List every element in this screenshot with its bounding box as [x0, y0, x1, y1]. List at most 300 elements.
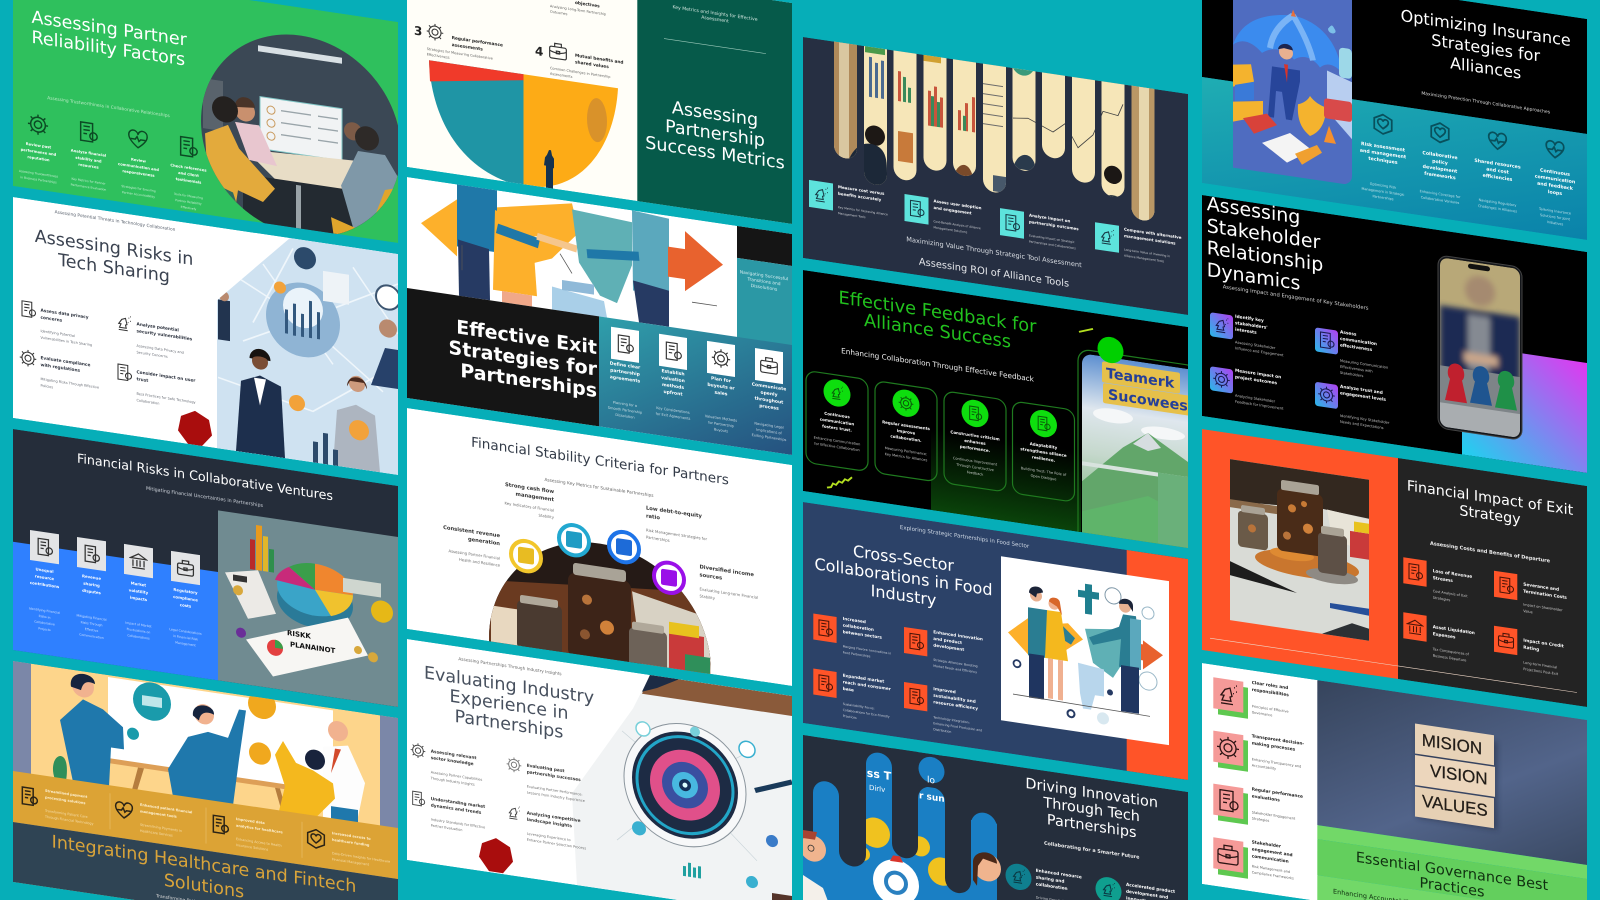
item: payment processing — [22, 785, 93, 826]
panel: Cross-Sector Collaborations in Food Industry — [803, 502, 1189, 780]
item: debt ratio: Risk Management Strategies for — [646, 527, 707, 541]
item: risk assessment: Optimizing Risk — [1370, 182, 1396, 190]
item: performance evaluations — [1213, 781, 1303, 833]
title: Stakeholder — [1207, 214, 1320, 254]
item: risk assessment: Partnerships — [1372, 194, 1394, 201]
item: past successes: partnership successes — [527, 769, 581, 783]
item: risk assessment: and management — [1360, 148, 1407, 161]
subtitle: Assessing Costs and Benefits of Departure — [1430, 541, 1551, 565]
item: transparent decisions — [1213, 728, 1304, 780]
item: analyze financial stability: Performance Evaluation — [71, 183, 106, 192]
title: Financial Stability Criteria for Partners — [471, 435, 729, 489]
item: expanded market — [813, 668, 892, 725]
card: continuous communication: fosters trust. — [822, 423, 852, 433]
item: performance evaluations: Stakeholder Engagement — [1252, 810, 1295, 821]
item: unequal contributions: Risks in — [39, 614, 50, 620]
item: increased collaboration: Increased — [843, 616, 866, 624]
phone photo: Teamerk — [1106, 366, 1175, 392]
item: unequal contributions: Projects — [38, 626, 51, 632]
item: liquidation expenses: Business Departure — [1433, 654, 1466, 663]
squiggle accents — [827, 290, 1093, 527]
item: resource sharing: Enhanced resource — [1036, 869, 1082, 881]
item: review communication: communication and — [118, 162, 159, 172]
item: partnership outcomes — [1000, 208, 1079, 251]
panel: Assessing Partner Reliability Factors — [13, 0, 403, 258]
title: Assessing — [672, 98, 758, 131]
item: clear agreements: Smooth Partnership — [608, 406, 643, 415]
item: performance evaluations: evaluations — [1252, 793, 1280, 804]
item: collaborative policy: Collaborative Ventures — [1421, 195, 1459, 205]
item 4: mutual benefits — [536, 42, 624, 78]
item: market volatility — [124, 544, 153, 641]
item: market volatility: Market — [131, 580, 146, 588]
subtitle: Assessing Impact and Engagement of Key Stakeholders — [1223, 284, 1369, 312]
item: performance evaluations: Regular performance — [1252, 787, 1303, 800]
card: constructive criticism: Feedback — [967, 470, 984, 477]
item: improved sustainability: sustainability and — [933, 693, 976, 704]
item 4: mutual benefits: Assessments — [550, 72, 573, 79]
item: trust levels: Identifying Key Stakeholder — [1340, 414, 1389, 425]
item: check references — [170, 135, 207, 213]
title: Financial Risks in Collaborative Ventures — [77, 452, 333, 504]
item: review past performance: Assessing Trustworthiness — [19, 169, 58, 179]
title: Strategies for — [1431, 31, 1540, 66]
item: shared resources: and cost — [1486, 166, 1510, 176]
item: revenue generation — [443, 525, 501, 568]
item: shared resources: Navigating Regulatory — [1479, 198, 1516, 208]
item: cost versus benefits: Management Tools — [838, 211, 866, 219]
card: constructive criticism: Continuous Improvement — [953, 456, 997, 467]
item: partnership outcomes: Evaluating Impact on Strategic — [1029, 233, 1074, 244]
title: Strategies for — [449, 336, 598, 381]
item: accelerated development — [1096, 875, 1175, 900]
item: stakeholder interests: Influence and Engagement — [1235, 346, 1284, 358]
title: Assessing — [1207, 192, 1300, 229]
item: resource sharing: collaboration — [1036, 881, 1068, 892]
item: unequal contributions: Unequal — [35, 566, 54, 574]
item: increased collaboration: Merging Flavors: Innovations in — [843, 644, 891, 656]
item: termination costs — [1494, 571, 1567, 620]
item: trust levels — [1315, 380, 1390, 431]
card: continuous communication: for Effective Collaboration — [814, 442, 860, 452]
divider — [1210, 638, 1577, 692]
item: communication effectiveness: Measuring Communication — [1340, 359, 1388, 370]
item: security vulnerabilities: security vulnerabilities — [136, 328, 193, 343]
item: security vulnerabilities: Analyze potential — [136, 322, 179, 334]
item: review communication: Review — [131, 157, 146, 164]
card: constructive criticism: enhances — [964, 438, 986, 446]
title: Effective Feedback for — [839, 287, 1036, 338]
item: clear agreements: agreements — [610, 374, 640, 385]
item: stakeholder interests: Identify key — [1235, 315, 1264, 324]
finger cut photo: r sun — [919, 791, 945, 805]
item: data privacy: Vulnerabilities in Tech Sharing — [41, 336, 92, 347]
title: Effective Exit — [456, 315, 597, 359]
item: user adoption — [904, 194, 982, 236]
item: cash flow — [505, 482, 555, 520]
item: performance evaluations: Strategies — [1252, 816, 1269, 823]
item: regulatory costs: costs — [180, 602, 192, 609]
title: Integrating Healthcare and Fintech — [52, 832, 356, 897]
item: diversified income: sources — [700, 572, 722, 582]
panel: Essential Governance Best Practices — [1202, 663, 1587, 900]
item: objectives: objectives — [575, 0, 600, 10]
item: review past performance: Review past — [26, 142, 51, 150]
item: analyze financial stability: Key Metrics for Partner — [71, 177, 106, 186]
item: valuation methods: Key Considerations — [656, 406, 690, 415]
item: increased collaboration — [813, 612, 891, 662]
item 3: performance assessments: assessments — [452, 42, 483, 53]
item: data analytics: analytics for healthcare — [236, 824, 283, 835]
item: patient financial tools: Streamlining Payments in — [140, 823, 182, 833]
item: review past performance: performance and — [21, 148, 57, 157]
item: termination costs: Impact on Shareholder — [1523, 603, 1562, 612]
item: regulatory costs: Legal Considerations — [169, 627, 202, 636]
item: alternatives: Compare with alternative — [1124, 227, 1181, 240]
item: communication loops: communication — [1535, 174, 1575, 186]
item: check references: and client — [178, 171, 199, 178]
item: data analytics: Enhancing Access to Health — [236, 837, 282, 848]
item: objectives: Outcomes — [550, 10, 568, 16]
item: valuation methods: methods — [662, 382, 684, 391]
item: data analytics: Improved data — [236, 817, 265, 825]
item: market dynamics: dynamics and trends — [431, 803, 482, 816]
item: enhanced innovation: Enhanced innovation — [933, 629, 983, 642]
item 4: mutual benefits: shared values — [575, 59, 609, 70]
item: project outcomes: project outcomes — [1235, 374, 1277, 386]
item: credit rating: Long-term Financial — [1523, 661, 1557, 670]
item: user trust: Collaboration — [136, 398, 159, 406]
half circle chart — [429, 60, 618, 198]
item: market dynamics — [413, 791, 485, 836]
item: transparent decisions: Transparent decision- — [1252, 734, 1304, 747]
card: constructive criticism: Constructive criticism — [950, 429, 1000, 442]
item: cost versus benefits — [809, 180, 888, 223]
item: payment processing: processing solutions — [45, 795, 85, 805]
item: clear roles: Principles of Effective — [1252, 704, 1289, 714]
card: adaptability — [1012, 401, 1074, 502]
item: enhanced innovation: Market Reach and Efficiency — [933, 664, 977, 674]
wooden blocks: VISION — [1430, 761, 1488, 789]
panel: Financial Risks in Collaborative Ventures — [13, 429, 398, 708]
circular jar photo — [487, 525, 712, 679]
item: revenue streams: Loss of Revenue — [1433, 569, 1472, 580]
title: Success Metrics — [645, 133, 785, 174]
item: alternatives: management solutions — [1124, 233, 1176, 246]
item: shared resources: Shared resources — [1474, 159, 1521, 171]
item: data analytics: Insurance Solutions — [236, 843, 268, 852]
item: patient financial tools: management tools — [140, 809, 177, 819]
item: revenue generation: Consistent revenue — [443, 525, 500, 539]
item: valuation methods: upfront — [663, 389, 683, 398]
card: constructive criticism — [944, 391, 1006, 492]
item: communicate: Communicate — [752, 383, 786, 393]
item: review communication — [118, 128, 159, 200]
item: check references: Tools for Measuring — [174, 192, 203, 200]
item: valuation methods — [656, 333, 691, 421]
item: review past performance — [19, 112, 58, 185]
item: cash flow: Key Indicators of Financial — [505, 500, 554, 513]
item: diversified income — [700, 564, 758, 607]
item: improved sustainability — [904, 682, 982, 739]
item: enhanced innovation: development — [933, 643, 964, 652]
item: revenue generation: Assessing Partner Financial — [448, 548, 500, 561]
title: Cross-Sector — [853, 541, 954, 575]
item: data privacy: Identifying Potential — [40, 329, 75, 338]
item: valuation methods: valuation — [661, 375, 685, 384]
item 3: performance assessments — [414, 24, 503, 60]
item: compliance: Mitigating Risks Through Effective — [40, 377, 99, 390]
item: competitive landscape: Analyzing competitive — [527, 811, 580, 824]
title: Partnerships — [460, 359, 597, 402]
item: payment processing: Transforming Patient Care — [45, 809, 87, 819]
item: buyouts: Valuation Methods — [705, 414, 737, 423]
item: accelerated development: Accelerated product — [1126, 883, 1175, 895]
item: market volatility: impacts — [130, 595, 148, 602]
item: cash flow: management — [516, 492, 554, 503]
item: stakeholder interests — [1210, 310, 1284, 358]
item: shared resources: Challenges in Alliances — [1478, 204, 1517, 214]
item: enhanced innovation — [904, 625, 983, 675]
title: Assessing ROI of Alliance Tools — [919, 257, 1069, 290]
title: Financial Impact of Exit — [1407, 478, 1573, 519]
item: valuation methods: for Exit Agreements — [656, 412, 691, 421]
red heptagon — [178, 408, 212, 447]
item: unequal contributions: Identifying Financial — [29, 606, 60, 615]
item: communication effectiveness: Effectiveness with — [1340, 365, 1373, 374]
item: credit rating: Impact on Credit — [1523, 639, 1564, 650]
item: trust levels: Needs and Expectations — [1340, 420, 1384, 430]
panel: Assessing ROI of Alliance Tools — [803, 17, 1188, 315]
item: communication effectiveness: Stakeholders — [1340, 371, 1363, 378]
subtitle: Mitigating Financial Uncertainties in Partnerships — [146, 486, 263, 509]
item: competitive landscape — [509, 805, 586, 851]
item: communicate: Exiting Partnerships — [752, 433, 787, 442]
card: regular assessments: collaboration. — [890, 433, 922, 443]
item: communicate: throughout — [755, 396, 784, 406]
item: increased collaboration: collaboration — [843, 622, 874, 632]
item: stakeholder interests: stakeholders' — [1235, 320, 1268, 331]
item: check references: Partner Reliability — [175, 198, 202, 206]
card: regular assessments: Measuring Performance: — [885, 446, 927, 456]
item: stakeholder engagement: Stakeholder — [1252, 840, 1281, 850]
finger cut photo: lo — [927, 775, 935, 787]
item: market dynamics: Understanding market — [431, 797, 485, 810]
item: compliance — [20, 350, 99, 389]
title: Partnerships — [1047, 812, 1136, 841]
title: Strategy — [1459, 503, 1521, 528]
panel: Effective Exit Strategies for Partnerships — [407, 177, 792, 455]
item: communicate: Navigating Legal — [754, 421, 784, 430]
item: buyouts: buyouts or — [707, 382, 735, 392]
panel: Assessing Partnership Success Metrics — [407, 0, 792, 224]
item: resource sharing: sharing and — [1036, 875, 1064, 885]
item: buyouts: sales — [715, 390, 728, 398]
item: valuation methods: Establish — [661, 369, 685, 378]
item: revenue generation: generation — [468, 537, 500, 547]
item: unequal contributions — [29, 530, 60, 634]
item 3: performance assessments: Strategies for Measuring Collaborative — [427, 47, 493, 61]
item: review communication: responsiveness — [122, 169, 155, 178]
item: diversified income: Evaluating Long-term Financial — [700, 586, 758, 600]
item: analyze financial stability: resources — [78, 163, 99, 170]
item: clear agreements — [608, 326, 643, 421]
target photo — [572, 663, 792, 900]
item: user adoption: and engagement — [934, 205, 972, 216]
item: termination costs: Severance and — [1523, 583, 1559, 593]
item: healthcare funding: Data-Driven Insights for Healthcare — [332, 851, 390, 864]
item: diversified income: Stability — [700, 593, 716, 601]
item: buyouts: for Partnership — [708, 421, 735, 428]
item: past successes: Evaluating Partner Performance: — [527, 785, 582, 797]
item: revenue disputes: Effective — [85, 627, 98, 633]
item: shared resources — [1474, 129, 1521, 214]
title: Evaluating Industry — [424, 663, 594, 708]
item: security vulnerabilities: Assessing Data Privacy and — [136, 344, 184, 355]
item: improved sustainability: Technology Integration: — [933, 715, 970, 725]
item: competitive landscape: Leveraging Experience to — [527, 832, 571, 842]
item: user adoption: Assess user adoption — [934, 198, 982, 210]
card: continuous communication: Continuous — [824, 411, 850, 419]
title: Tech Sharing — [57, 251, 170, 287]
item: clear agreements: partnership — [610, 367, 641, 378]
item: expanded market: reach and consumer — [843, 679, 892, 692]
wooden blocks: VALUES — [1422, 792, 1488, 820]
item: communication loops — [1535, 138, 1575, 228]
item: termination costs: Termination Costs — [1523, 589, 1567, 601]
item: clear roles: responsibilities — [1252, 687, 1289, 698]
card: regular assessments: Key Metrics for Alliances — [885, 452, 927, 462]
caption: Assessing Partnerships Through Industry Insights — [458, 656, 562, 676]
wooden blocks — [1415, 724, 1497, 830]
partnership illustration — [1001, 556, 1169, 745]
item: clear agreements: Dissolution — [615, 413, 635, 420]
item: shared resources: efficiencies — [1483, 173, 1513, 183]
item: past successes — [507, 756, 585, 803]
item: communication effectiveness: communication — [1340, 336, 1377, 347]
item: partnership outcomes: Analyze impact on — [1029, 212, 1070, 224]
item: regulatory costs: in Financial Risk — [173, 634, 198, 642]
panel: Effective Feedback for Alliance Success — [803, 270, 1198, 561]
item: sector knowledge: Assessing Partner Capabilities — [431, 770, 482, 782]
item: compliance: Policies — [41, 384, 53, 389]
item: past successes: Evaluating past — [527, 764, 564, 774]
item: liquidation expenses — [1403, 612, 1475, 664]
item: regulatory costs: compliance — [173, 594, 198, 603]
title: Reliability Factors — [31, 28, 185, 70]
panel: Optimizing Insurance Strategies for Alliances — [1202, 0, 1587, 240]
item: resource sharing — [1006, 862, 1082, 900]
whiteboard illustration — [52, 674, 366, 822]
panel: Financial Stability Criteria for Partners — [407, 408, 792, 691]
item 4: mutual benefits: 4 — [535, 44, 543, 59]
item: revenue disputes: Communication — [79, 632, 104, 640]
item: stakeholder engagement: Risk Management and — [1252, 864, 1290, 874]
item: cost versus benefits: benefits accurately — [838, 191, 882, 202]
item: competitive landscape: landscape insights — [527, 817, 572, 829]
title: Relationship — [1207, 236, 1323, 276]
red heptagon — [479, 836, 513, 875]
item: data privacy: Assess data privacy — [40, 309, 89, 321]
title: Assessing Risks in — [35, 227, 193, 270]
item: revenue streams — [1403, 557, 1472, 605]
title: Collaborations in Food — [815, 554, 992, 600]
subtitle: Maximizing Protection Through Collaborative Approaches — [1421, 90, 1551, 116]
item: communication effectiveness — [1315, 326, 1388, 382]
item: communicate: process — [759, 403, 779, 412]
card: constructive criticism: performance. — [960, 444, 991, 453]
item: trust levels: Analyze trust and — [1340, 385, 1383, 396]
green panel subtitle: Key Metrics and Insights for Effective — [672, 5, 758, 23]
item 4: mutual benefits: Mutual benefits and — [575, 54, 624, 66]
item: data analytics — [213, 814, 283, 854]
item: expanded market: base — [843, 686, 854, 693]
item: communication loops: Initiatives — [1547, 220, 1563, 226]
item: market volatility: Fluctuations on — [127, 627, 150, 635]
item: clear agreements: Planning for a — [613, 400, 637, 408]
card: continuous communication: communication — [820, 417, 854, 427]
item: revenue streams: Strategies — [1433, 596, 1450, 602]
item: user trust: Consider impact on user — [136, 370, 195, 384]
item: collaborative policy: development — [1423, 164, 1458, 175]
title: Alliance Success — [864, 310, 1011, 353]
title: Assessing Partner — [32, 8, 187, 51]
item: sector knowledge — [411, 742, 483, 788]
item: communication effectiveness: effectiveness — [1340, 342, 1373, 353]
item: risk assessment — [1360, 111, 1407, 203]
item: trust levels: engagement levels — [1340, 390, 1386, 403]
item: user trust — [117, 363, 196, 405]
item: risk assessment: Management in Strategic — [1362, 187, 1405, 197]
item: revenue disputes: disputes — [82, 588, 102, 596]
title: Partnerships — [455, 707, 563, 743]
panel: Financial Impact of Exit Strategy — [1202, 429, 1587, 707]
item: liquidation expenses: Expenses — [1433, 631, 1456, 641]
item: liquidation expenses: Asset Liquidation — [1433, 625, 1475, 636]
title: Driving Innovation — [1025, 776, 1158, 812]
item: cost versus benefits: Key Metrics for Assessing Alliance — [838, 205, 888, 217]
item: objectives: Analyzing Long-Term Partnership — [550, 4, 606, 16]
item: communication loops: Solutions for Joint — [1540, 213, 1571, 222]
card: adaptability: strengthens alliance — [1020, 446, 1067, 458]
item: revenue disputes: Revenue — [82, 573, 101, 581]
green panel subtitle: Assessment — [701, 15, 729, 25]
card: adaptability: resilience. — [1032, 454, 1056, 463]
item: review past performance: in Business Partnerships — [20, 175, 57, 185]
wooden blocks: MISION — [1422, 731, 1482, 758]
item: debt ratio: ratio — [646, 513, 660, 521]
item: partnership outcomes: partnership outcomes — [1029, 219, 1079, 231]
item: credit rating: Rating — [1523, 645, 1539, 653]
card: constructive criticism: Through Constructive — [955, 463, 994, 472]
item: healthcare funding — [306, 829, 390, 866]
item 3: performance assessments: Effectiveness — [427, 52, 450, 60]
item: payment processing: Through Financial Technology — [44, 815, 93, 826]
item: communication loops: loops — [1548, 189, 1562, 197]
item: communicate — [752, 348, 787, 442]
item: regulatory costs: Regulatory — [173, 587, 198, 595]
panel: Assessing Risks in Tech Sharing — [13, 197, 403, 480]
item: stakeholder interests: interests — [1235, 327, 1257, 336]
item: buyouts: Plan for — [711, 377, 731, 384]
item: cash flow: Strong cash flow — [505, 482, 554, 495]
item: communication loops: and feedback — [1537, 181, 1574, 192]
subtitle: Assessing Trustworthiness in Collaborative Relationships — [47, 95, 170, 119]
phone photo — [1078, 332, 1198, 561]
panel: Driving Innovation Through Tech Partnerships — [800, 725, 1188, 900]
item: healthcare funding: Financial Management — [332, 857, 370, 867]
subtitle: Collaborating for a Smarter Future — [1044, 841, 1140, 861]
